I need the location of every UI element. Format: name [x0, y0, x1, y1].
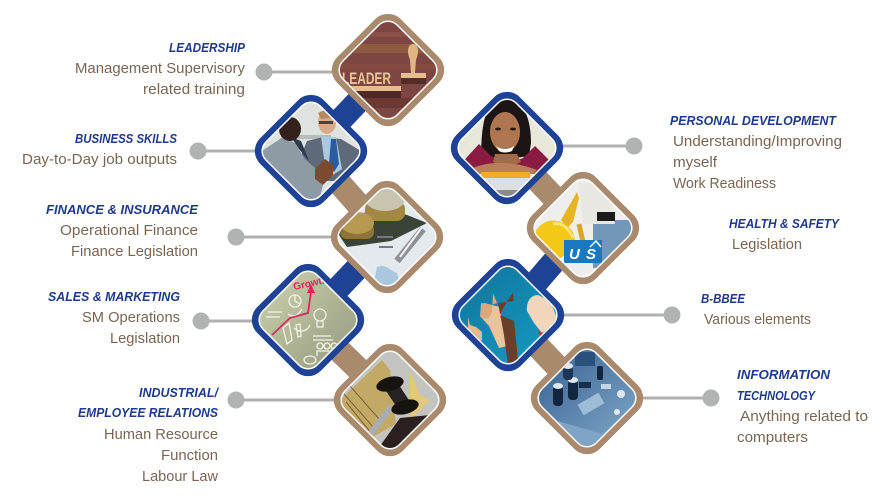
text block: leadership [75, 41, 246, 98]
text block: information technology: TECHNOLOGY [737, 389, 816, 403]
text block: business skills [22, 132, 178, 168]
leader line: personal development [558, 138, 642, 154]
text block: health and safety: Legislation [732, 237, 802, 253]
leader line: sales [192, 312, 260, 330]
text block: industrial and employee relations: EMPLOYEE RELATIONS [78, 406, 219, 420]
diamond: business skills photo [254, 94, 368, 208]
diamond: sales and marketing photo: Growth [292, 275, 329, 293]
diamond: leadership photo: LEADER [342, 69, 391, 88]
text block: business skills: Day-to-Day job outputs [22, 152, 177, 168]
text block: health and safety [729, 217, 841, 253]
diamond: leadership photo [332, 14, 444, 126]
text block: personal development: myself [673, 155, 718, 171]
text block: industrial and employee relations: Labour Law [142, 469, 219, 485]
text block: leadership: LEADERSHIP [169, 41, 246, 55]
diamond: sales and marketing photo [252, 264, 364, 376]
diamond: industrial relations photo [334, 344, 446, 456]
text block: sales and marketing: Legislation [110, 331, 180, 347]
text block: finance and insurance: Finance Legislation [71, 244, 198, 260]
text block: personal development: Understanding/Improving [673, 134, 842, 150]
text block: finance and insurance [46, 203, 199, 260]
text block: industrial and employee relations [78, 386, 220, 485]
leader line: business skills [190, 142, 262, 160]
text block: leadership: Management Supervisory [75, 61, 246, 77]
text block: information technology: INFORMATION [737, 368, 831, 382]
text block: finance and insurance: FINANCE & INSURANCE [46, 203, 199, 217]
text block: b-bbee: Various elements [704, 312, 811, 328]
leader line: industrial [228, 392, 342, 408]
text block: finance and insurance: Operational Finance [60, 223, 198, 239]
text block: personal development: PERSONAL DEVELOPMENT [670, 114, 837, 128]
leader line: leadership [256, 64, 340, 80]
text block: b-bbee: B-BBEE [701, 292, 746, 306]
text block: sales and marketing [48, 290, 180, 347]
leader line: information technology [638, 390, 720, 406]
text block: information technology: Anything related to [740, 409, 868, 425]
text block: information technology [737, 368, 868, 446]
text block: industrial and employee relations: Human Resource [104, 427, 218, 443]
diamond: health and safety photo [526, 172, 640, 284]
diamond: b-bbee photo [452, 258, 564, 372]
text block: leadership: related training [143, 82, 245, 98]
diamond: finance and insurance photo [330, 180, 444, 294]
text block: information technology: computers [737, 430, 808, 446]
text block: personal development: Work Readiness [673, 176, 776, 192]
text block: sales and marketing: SM Operations [82, 310, 180, 326]
connectors between left diamonds [308, 70, 390, 400]
diamond: personal development photo [450, 92, 564, 204]
text block: industrial and employee relations: Function [161, 448, 218, 464]
text block: personal development [670, 114, 842, 192]
text block: business skills: BUSINESS SKILLS [75, 132, 178, 146]
text block: industrial and employee relations: INDUSTRIAL/ [139, 386, 220, 400]
leader line: finance [228, 228, 338, 246]
diamond: health and safety photo: US [569, 246, 596, 263]
connectors between right diamonds [507, 148, 587, 398]
text block: b-bbee [701, 292, 811, 328]
text block: sales and marketing: SALES & MARKETING [48, 290, 180, 304]
leader line: b-bbee [560, 306, 680, 324]
text block: health and safety: HEALTH & SAFETY [729, 217, 841, 231]
diamond: information technology photo [530, 342, 644, 454]
